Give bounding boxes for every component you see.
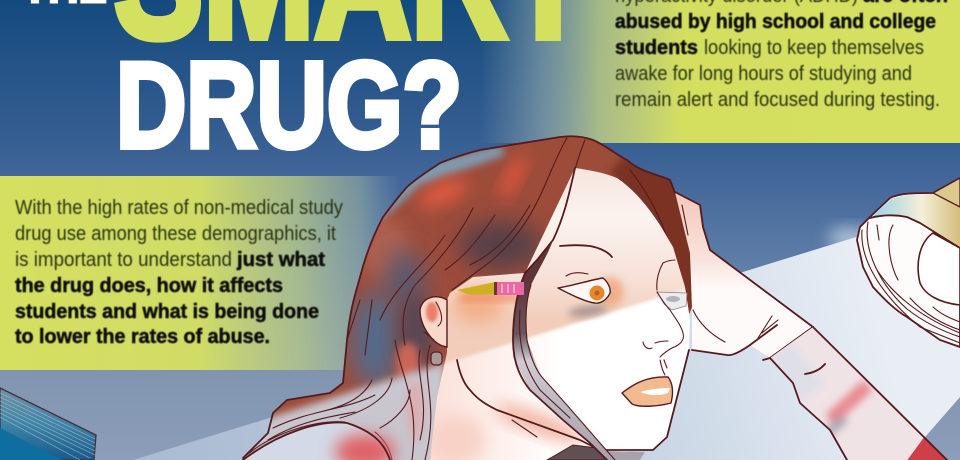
hair outline [243,136,675,458]
intro paragraph: abused by high school and college [615,10,936,33]
sleeve shading [770,340,960,460]
shoulder outline [243,423,390,460]
lamp light beam [133,205,960,460]
hair strand lines [243,138,680,460]
hair shading [230,145,700,460]
shoulder red shading [335,434,395,460]
illustration: hair strand across cheek [513,168,615,460]
illustration: book [0,388,96,460]
explanation paragraph: the drug does, how it affects [15,274,283,297]
title: DRUG? [116,37,462,173]
illustration: shoulder [243,423,395,460]
illustration: ear [420,297,447,347]
illustration: eyes, nose and mouth [558,245,687,406]
panel: intro text right [480,0,960,143]
finger lines [682,205,778,342]
explanation paragraph: drug use among these demographics, it [15,222,336,245]
hand outline [675,192,813,360]
sleeve outline [770,327,947,460]
title [22,0,589,173]
lamp rim lines [870,215,960,248]
face shading and beam highlight [425,277,700,460]
lamp opening [918,233,960,305]
sleeve [770,327,960,460]
strand inner lines [520,285,615,460]
illustration: collar [547,445,645,460]
explanation paragraph: just what [236,248,325,271]
illustration: hair [230,136,700,460]
intro paragraph: awake for long hours of studying and [615,62,912,85]
intro paragraph: looking to keep themselves [704,36,924,59]
explanation paragraph: students and what is being done [15,300,319,323]
intro paragraph: students [615,36,698,59]
explanation paragraph: With the high rates of non-medical study [15,196,344,219]
illustration: hand [675,192,813,360]
panel: explanation text left [0,176,400,370]
lamp collar [933,178,960,207]
lamp glow [828,228,872,248]
neck crease [512,420,537,437]
illustration: earring [431,352,442,365]
jaw and neck lines [457,350,689,450]
illustration: face and neck [425,168,700,460]
explanation paragraph: to lower the rates of abuse. [15,325,270,348]
illustration: lamp [857,178,960,347]
lamp cap [871,194,960,248]
explanation paragraph: is important to understand [15,248,232,271]
illustration: pencil behind ear [457,282,524,295]
strand outline [513,168,607,460]
